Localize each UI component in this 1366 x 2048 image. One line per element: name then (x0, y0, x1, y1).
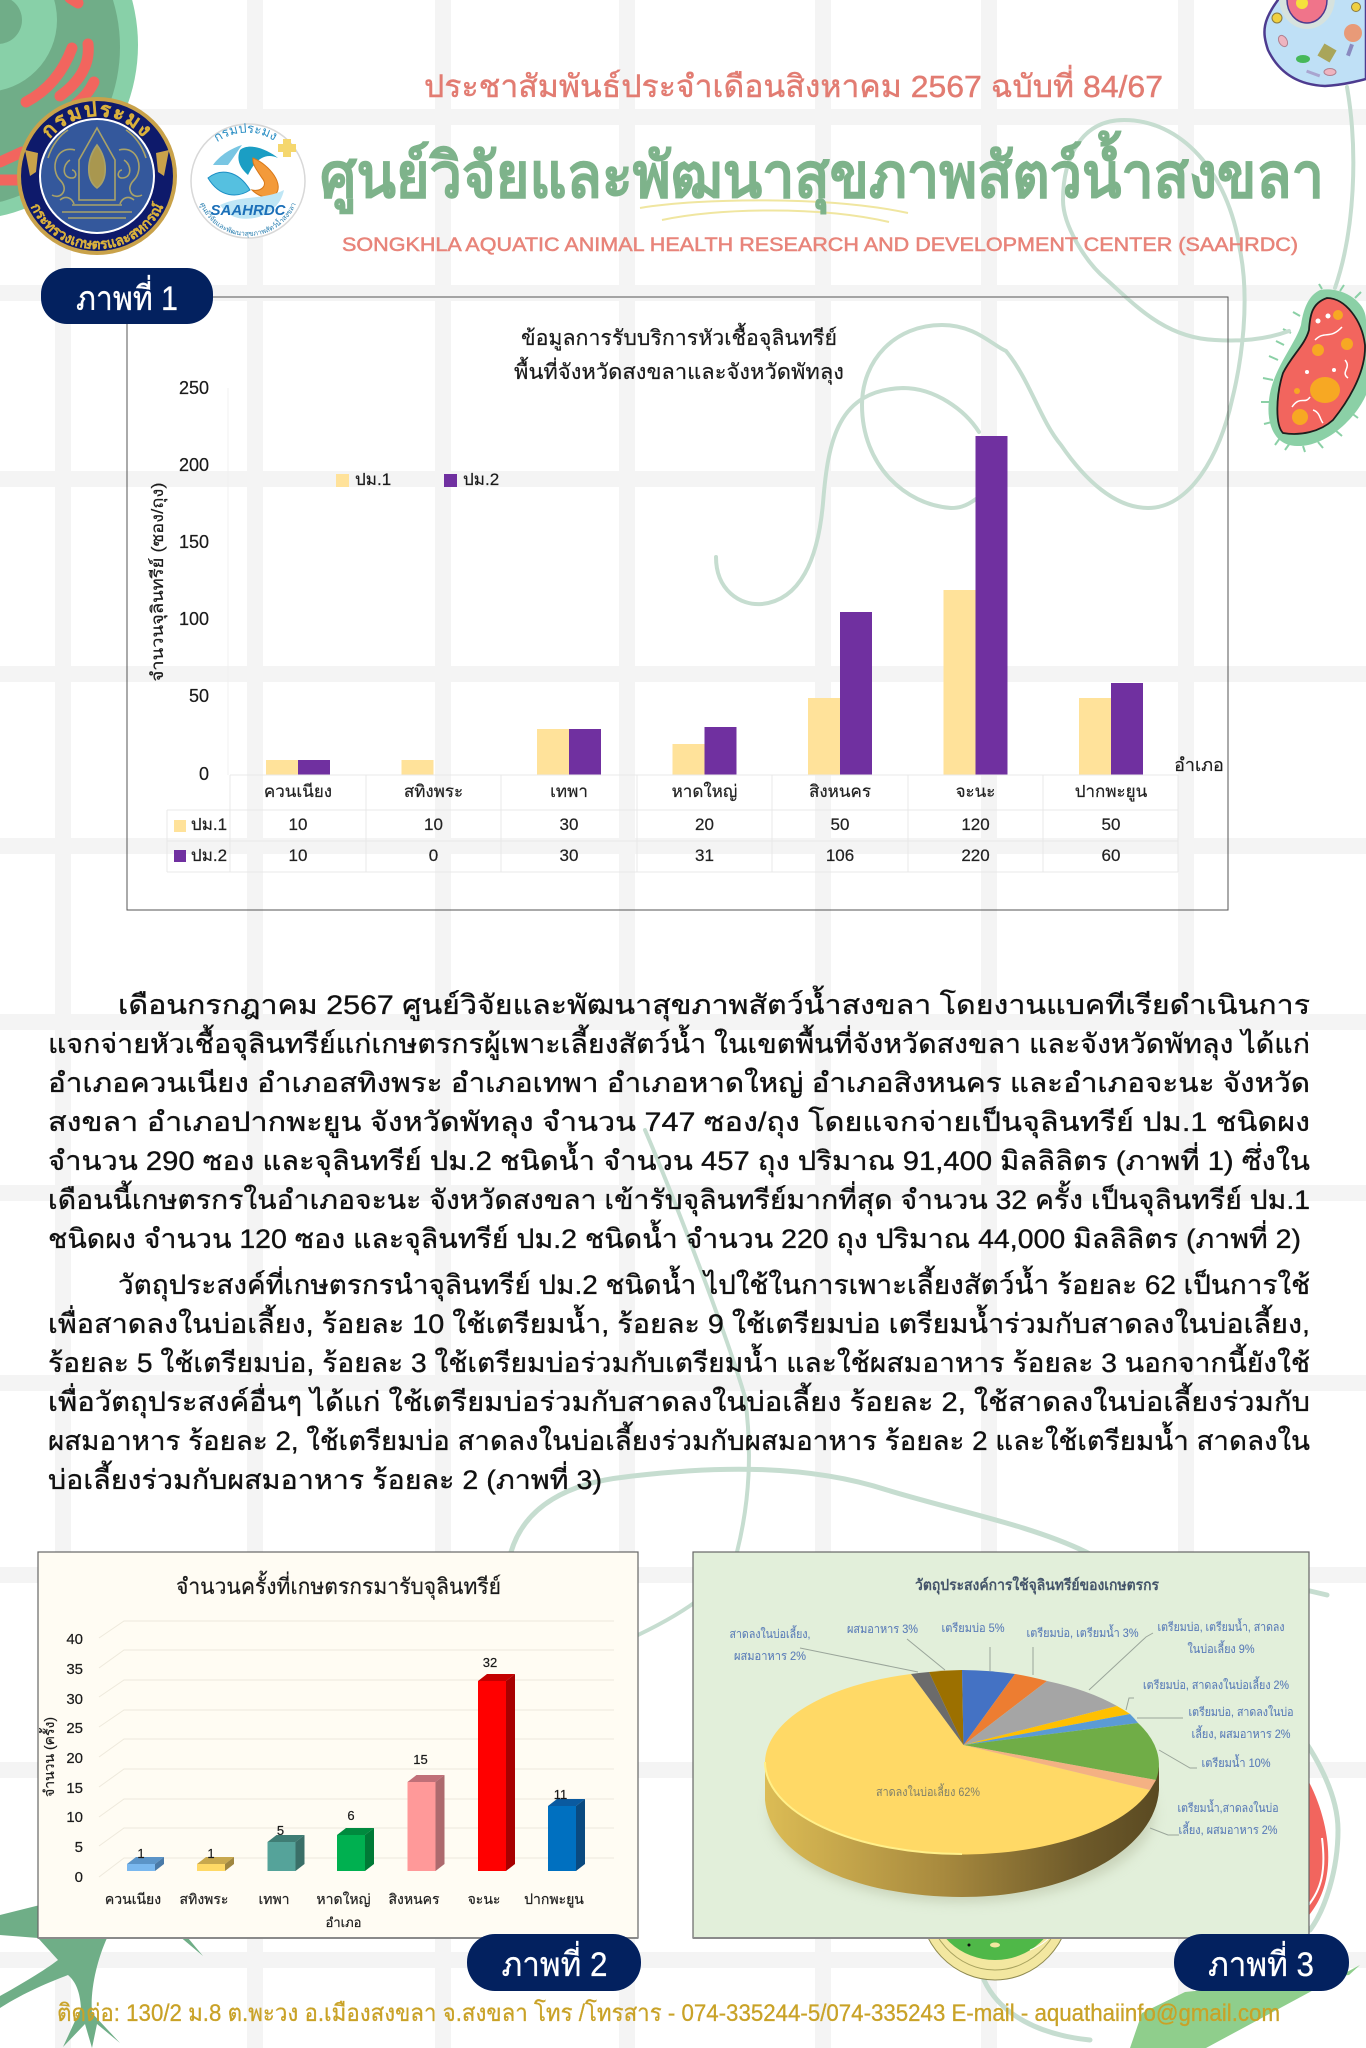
slice labels: สาดลงในบ่อเลี้ยง 62% (876, 1783, 980, 1799)
slice labels: ผสมอาหาร 2% (734, 1649, 806, 1663)
y axis labels: 150 (179, 532, 209, 552)
chart title: พื้นที่จังหวัดสงขลาและจังหวัดพัทลุง (514, 357, 844, 385)
data table: สิงหนคร (809, 782, 871, 801)
y axis title: จำนวนจุลินทรีย์ (ซอง/ถุง) (148, 482, 168, 682)
y axis title: จำนวน (ครั้ง) (39, 1717, 57, 1797)
value labels: 11 (554, 1787, 567, 1802)
badge: figure 2 (467, 1934, 641, 1991)
panel: figure 1 bar chart (127, 297, 1228, 910)
text block: paragraph 1: แจกจ่ายหัวเชื้อจุลินทรีย์แก่เกษตรกรผู้เพาะเลี้ยงสัตว์น้ำ ในเขตพื้นที่จังหวัดสงขลา และจังหวัดพัทลุง ได้แก่ (48, 1024, 1310, 1061)
badge: figure 1: ภาพที่ 1 (76, 275, 178, 318)
slice labels: เตรียมบ่อ, เตรียมน้ำ 3% (1026, 1624, 1139, 1640)
badge: figure 3: ภาพที่ 3 (1208, 1941, 1314, 1984)
text block: paragraph 1: สงขลา อำเภอปากพะยูน จังหวัดพัทลุง จำนวน 747 ซอง/ถุง โดยแจกจ่ายเป็นจุลินทรีย์ ปม.1 ชนิดผง (48, 1104, 1310, 1139)
slice labels: เตรียมน้ำ,สาดลงในบ่อ (1178, 1799, 1278, 1815)
axis label: district: อำเภอ (1174, 755, 1224, 775)
bars (266, 436, 1143, 775)
logo: SAAHRDC: SAAHRDC (210, 202, 287, 219)
logo: department of fisheries emblem (17, 97, 177, 255)
data table: 10 (289, 815, 307, 834)
text block: paragraph 1 (48, 985, 1310, 1256)
data table: 50 (1102, 815, 1120, 834)
text block: paragraph 1: ชนิดผง จำนวน 120 ซอง และจุลินทรีย์ ปม.2 ชนิดน้ำ จำนวน 220 ถุง ปริมาณ 44,000 มิลลิลิตร (ภาพที่ 2) (48, 1219, 1301, 1256)
category labels: จะนะ (468, 1891, 500, 1907)
value labels: 32 (483, 1655, 497, 1670)
category labels: ควนเนียง (105, 1891, 161, 1907)
footer: contact line: ติดต่อ: 130/2 ม.8 ต.พะวง อ.เมืองสงขลา จ.สงขลา โทร /โทรสาร - 074-335244-5/074-335243 E-mail - aquathaiinfo@gmail.com (57, 1999, 1280, 2027)
panel: figure 3 pie chart (693, 1552, 1309, 1938)
text block: paragraph 2: เพื่อวัตถุประสงค์อื่นๆ ได้แก่ ใช้เตรียมบ่อร่วมกับสาดลงในบ่อเลี้ยง ร้อยละ 2, ใช้สาดลงในบ่อเลี้ยงร่วมกับ (48, 1382, 1310, 1419)
data table: 30 (560, 846, 578, 865)
icon: red cell behind pie (1305, 1775, 1328, 1920)
logo: SAAHRDC: ศูนย์วิจัยและพัฒนาสุขภาพสัตว์น้ำสงขลา (199, 203, 296, 238)
chart title: ข้อมูลการรับบริการหัวเชื้อจุลินทรีย์ (521, 323, 837, 351)
y axis labels (66, 1631, 83, 1886)
value labels: 1 (207, 1846, 215, 1861)
data table: สทิงพระ (404, 782, 463, 801)
icon: bottom-left green neuron (0, 1905, 203, 2048)
badge: figure 3 (1174, 1934, 1349, 1991)
data table: 10 (289, 846, 307, 865)
leader lines (800, 1633, 1197, 1835)
text block: paragraph 1: จำนวน 290 ซอง และจุลินทรีย์ ปม.2 ชนิดน้ำ จำนวน 457 ถุง ปริมาณ 91,400 มิลลิลิตร (ภาพที่ 1) ซึ่งใน (48, 1141, 1310, 1178)
y axis labels: 25 (66, 1720, 83, 1737)
data table: 20 (695, 815, 714, 834)
3D pie (765, 1670, 1159, 1902)
icon: top-left green cell (0, 0, 138, 220)
y axis labels: 30 (66, 1691, 83, 1708)
y axis labels: 100 (179, 609, 209, 629)
slice labels: ในบ่อเลี้ยง 9% (1188, 1640, 1255, 1656)
category labels: สทิงพระ (180, 1891, 228, 1907)
y axis labels: 50 (189, 686, 209, 706)
header: bulletin line: ประชาสัมพันธ์ประจำเดือนสิงหาคม 2567 ฉบับที่ 84/67 (424, 65, 1163, 104)
slice labels (730, 1618, 1294, 1837)
data table: หาดใหญ่ (672, 781, 737, 801)
category labels: สิงหนคร (388, 1891, 440, 1907)
data table: เทพา (550, 782, 588, 801)
data table: 30 (560, 815, 578, 834)
panel: figure 2 3D bar chart (38, 1552, 638, 1938)
y axis labels: 10 (66, 1809, 83, 1826)
data table: 120 (961, 815, 990, 834)
data table: ปม.1 (191, 815, 227, 834)
text block: paragraph 1: เดือนนี้เกษตรกรในอำเภอจะนะ จังหวัดสงขลา เข้ารับจุลินทรีย์มากที่สุด จำนวน 32 ครั้ง เป็นจุลินทรีย์ ปม.1 (48, 1180, 1310, 1217)
chart title: จำนวนครั้งที่เกษตรกรมารับจุลินทรีย์ (176, 1571, 501, 1600)
logo: SAAHRDC: กรมประมง (214, 123, 276, 142)
data table: 31 (695, 846, 714, 865)
text block: paragraph 2: ร้อยละ 5 ใช้เตรียมบ่อ, ร้อยละ 3 ใช้เตรียมบ่อร่วมกับเตรียมน้ำ และใช้ผสมอาหาร ร้อยละ 3 นอกจากนี้ยังใช้ (48, 1343, 1310, 1378)
icon: bottom-right green leaf (1130, 1965, 1360, 2048)
y axis labels (179, 378, 209, 784)
icon: top-right blue cell (1264, 0, 1366, 86)
text block: paragraph 2: เพื่อสาดลงในบ่อเลี้ยง, ร้อยละ 10 ใช้เตรียมน้ำ, ร้อยละ 9 ใช้เตรียมบ่อ เตรียมน้ำร่วมกับสาดลงในบ่อเลี้ยง, (48, 1304, 1310, 1339)
data table: ปากพะยูน (1075, 782, 1148, 802)
category labels (105, 1891, 584, 1930)
y axis labels: 250 (179, 378, 209, 398)
data table: 60 (1102, 846, 1120, 865)
category labels: อำเภอ (326, 1915, 361, 1930)
text block: paragraph 2: ผสมอาหาร ร้อยละ 2, ใช้เตรียมบ่อ สาดลงในบ่อเลี้ยงร่วมกับผสมอาหาร ร้อยละ 2 และใช้เตรียมน้ำ สาดลงใน (48, 1421, 1310, 1456)
text block: paragraph 2: บ่อเลี้ยงร่วมกับผสมอาหาร ร้อยละ 2 (ภาพที่ 3) (48, 1460, 602, 1495)
data table: 106 (826, 846, 854, 865)
header: title swoosh (640, 200, 908, 222)
legend: ปม.2 (463, 470, 499, 489)
data table: จะนะ (956, 782, 995, 801)
text block: paragraph 2: วัตถุประสงค์ที่เกษตรกรนำจุลินทรีย์ ปม.2 ชนิดน้ำ ไปใช้ในการเพาะเลี้ยงสัตว์น้ำ ร้อยละ 62 เป็นการใช้ (118, 1265, 1310, 1302)
chart title: วัตถุประสงค์การใช้จุลินทรีย์ของเกษตรกร (915, 1576, 1160, 1595)
header: english name: SONGKHLA AQUATIC ANIMAL HEALTH RESEARCH AND DEVELOPMENT CENTER (SAAHRDC) (342, 235, 1298, 256)
category labels: เทพา (258, 1891, 290, 1907)
category labels: หาดใหญ่ (316, 1891, 371, 1907)
value labels: 6 (347, 1808, 355, 1823)
data table: 50 (831, 815, 849, 834)
y axis labels: 200 (179, 455, 209, 475)
category labels: ปากพะยูน (524, 1891, 584, 1908)
data table: ปม.2 (191, 846, 227, 865)
logo: department of fisheries emblem: กระทรวงเกษตรและสหกรณ์ (30, 200, 164, 250)
slice labels: สาดลงในบ่อเลี้ยง, (730, 1625, 810, 1641)
icon: right green bacterium (1261, 284, 1366, 452)
data table: 0 (429, 846, 438, 865)
data table: 220 (961, 846, 990, 865)
3D bars (127, 1674, 585, 1871)
y axis labels: 0 (75, 1869, 83, 1886)
logo: SAAHRDC (190, 123, 306, 239)
icon: green bacterium behind panel (919, 1814, 1071, 1980)
gridlines (99, 1621, 614, 1877)
data table (167, 388, 1178, 872)
value labels: 1 (137, 1846, 145, 1861)
slice labels: เลี้ยง, ผสมอาหาร 2% (1178, 1821, 1278, 1837)
badge: figure 1 (41, 268, 213, 324)
slice labels: เลี้ยง, ผสมอาหาร 2% (1192, 1725, 1291, 1741)
value labels (137, 1655, 567, 1861)
y axis labels: 20 (66, 1750, 83, 1767)
slice labels: เตรียมบ่อ, เตรียมน้ำ, สาดลง (1158, 1618, 1284, 1634)
text block: paragraph 2 (48, 1265, 1310, 1495)
logo: department of fisheries emblem: กรมประมง (43, 101, 150, 138)
data table: 10 (424, 815, 443, 834)
y axis labels: 15 (66, 1780, 83, 1797)
y axis labels: 0 (199, 764, 209, 784)
slice labels: เตรียมบ่อ, สาดลงในบ่อเลี้ยง 2% (1143, 1676, 1289, 1692)
y axis labels: 40 (66, 1631, 83, 1648)
chart title (514, 323, 844, 385)
text block: paragraph 1: อำเภอควนเนียง อำเภอสทิงพระ อำเภอเทพา อำเภอหาดใหญ่ อำเภอสิงหนคร และอำเภอจะนะ จังหวัด (48, 1067, 1310, 1098)
icon: green tentacle curves (511, 87, 1353, 2040)
slice labels: เตรียมบ่อ 5% (942, 1621, 1005, 1635)
slice labels: เตรียมบ่อ, สาดลงในบ่อ (1188, 1705, 1294, 1719)
legend: ปม.1 (355, 470, 391, 489)
slice labels: ผสมอาหาร 3% (847, 1622, 918, 1636)
y axis labels: 5 (75, 1839, 83, 1856)
text block: paragraph 1: เดือนกรกฎาคม 2567 ศูนย์วิจัยและพัฒนาสุขภาพสัตว์น้ำสงขลา โดยงานแบคทีเรียดำเนินการ (118, 985, 1310, 1022)
y axis labels: 35 (66, 1661, 83, 1678)
badge: figure 2: ภาพที่ 2 (502, 1941, 608, 1984)
data table: ควนเนียง (264, 782, 332, 801)
slice labels: เตรียมน้ำ 10% (1202, 1754, 1271, 1770)
value labels: 5 (277, 1823, 284, 1838)
value labels: 15 (413, 1752, 428, 1767)
legend (336, 470, 499, 489)
